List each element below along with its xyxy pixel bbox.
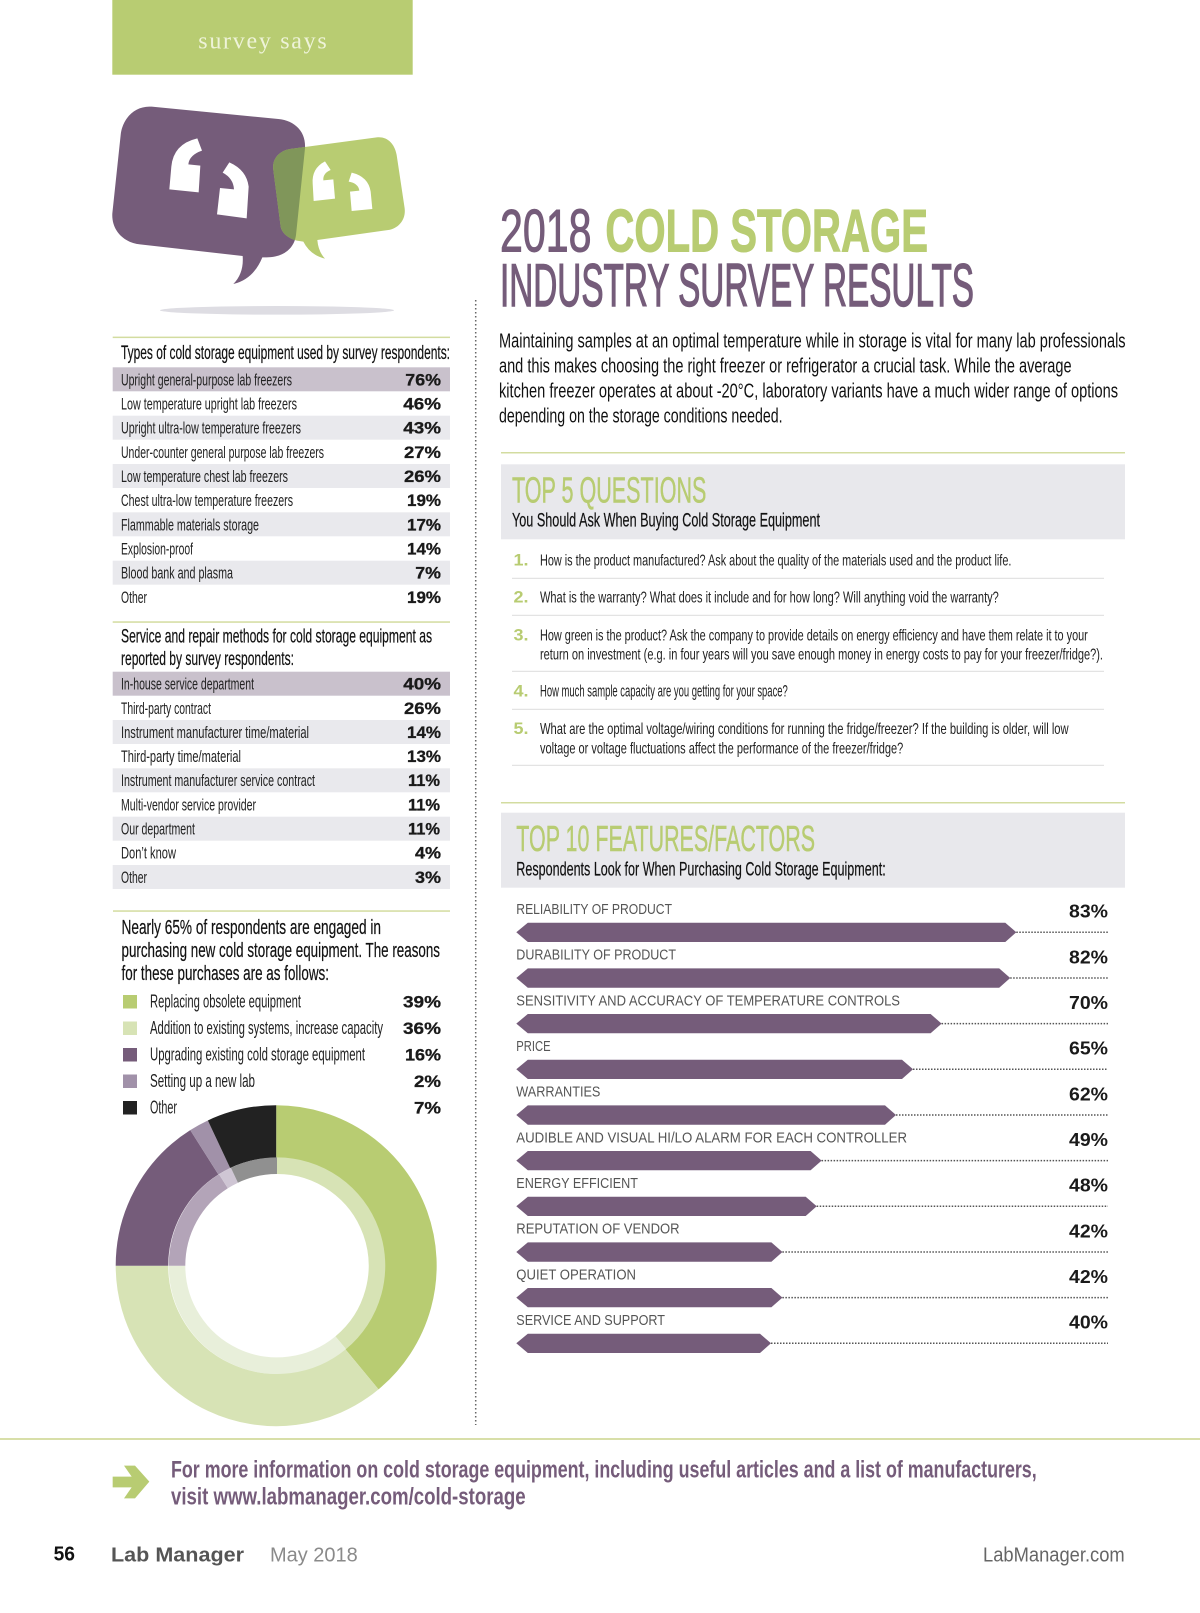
question 5 xyxy=(514,719,1069,757)
bar: warranties 62% xyxy=(516,1084,1108,1125)
panel: purchase reasons legend: 36% xyxy=(403,1020,441,1038)
question 5: voltage or voltage fluctuations affect the performance of the freezer/fridge? xyxy=(540,740,903,757)
panel: service and repair methods: Other xyxy=(121,868,147,887)
bar: price 65% xyxy=(516,1038,1108,1079)
panel: service and repair methods: 13% xyxy=(407,748,441,766)
panel: service and repair methods: Instrument manufacturer time/material xyxy=(121,723,309,742)
panel: service and repair methods: Our department xyxy=(121,820,195,839)
question 4: 4. xyxy=(514,682,528,701)
bar: price 65%: 65% xyxy=(1069,1039,1108,1059)
bar: reliability 83% xyxy=(516,901,1108,942)
callout: more information xyxy=(171,1457,1037,1511)
donut chart: purchase reasons xyxy=(142,1131,410,1400)
panel: service and repair methods: 11% xyxy=(408,796,440,814)
panel: purchase reasons legend: 39% xyxy=(403,993,441,1011)
panel: types of cold storage equipment: Explosion-proof xyxy=(121,540,193,559)
bar: alarm 49% xyxy=(516,1129,1108,1170)
panel: service and repair methods: Multi-vendor service provider xyxy=(121,795,256,814)
panel: top 10 features header: Respondents Look for When Purchasing Cold Storage Equipment: xyxy=(516,859,886,880)
title xyxy=(500,198,974,319)
question 4 xyxy=(514,682,788,701)
panel: service and repair methods: 4% xyxy=(415,845,441,863)
bar: service 40%: 40% xyxy=(1069,1313,1108,1333)
question 1: 1. xyxy=(514,550,528,569)
bar: quiet 42%: 42% xyxy=(1069,1267,1108,1287)
question 4: How much sample capacity are you getting for your space? xyxy=(540,682,788,701)
bar: alarm 49%: 49% xyxy=(1069,1130,1108,1150)
heading: equipment types: Types of cold storage equipment used by survey respondents: xyxy=(121,343,450,364)
panel: types of cold storage equipment: 76% xyxy=(405,371,441,389)
panel: types of cold storage equipment: Other xyxy=(121,588,147,607)
panel: service and repair methods: 11% xyxy=(408,772,440,790)
heading: purchase reasons xyxy=(122,916,440,985)
panel: types of cold storage equipment: 7% xyxy=(415,565,441,583)
icon: arrow xyxy=(113,1466,149,1498)
footer: 56 xyxy=(54,1544,75,1566)
panel: types of cold storage equipment xyxy=(113,337,450,607)
footer: LabManager.com xyxy=(983,1545,1125,1567)
footer: May 2018 xyxy=(270,1544,358,1566)
panel: service and repair methods: Don’t know xyxy=(121,844,176,863)
panel: purchase reasons legend: Setting up a new lab xyxy=(150,1071,255,1091)
intro paragraph xyxy=(499,330,1126,427)
question 2 xyxy=(514,588,999,607)
panel: purchase reasons legend xyxy=(113,910,450,1117)
panel: types of cold storage equipment: Low temperature chest lab freezers xyxy=(121,467,288,486)
panel: types of cold storage equipment: Upright ultra-low temperature freezers xyxy=(121,419,301,438)
callout: more information: visit www.labmanager.com/cold-storage xyxy=(171,1484,526,1511)
question 3 xyxy=(514,625,1103,663)
bar: service 40%: SERVICE AND SUPPORT xyxy=(516,1312,665,1329)
heading: service and repair xyxy=(121,627,432,670)
bar: durability 82% xyxy=(516,947,1108,988)
panel: types of cold storage equipment: 43% xyxy=(403,420,441,438)
panel: purchase reasons legend: Addition to existing systems, increase capacity xyxy=(150,1018,383,1038)
question 3: 3. xyxy=(514,625,528,644)
panel: service and repair methods: 26% xyxy=(404,700,441,718)
vertical dotted divider xyxy=(475,300,477,1425)
heading: purchase reasons: Nearly 65% of respondents are engaged in xyxy=(122,916,381,939)
panel: service and repair methods xyxy=(113,621,450,889)
panel: types of cold storage equipment: Blood bank and plasma xyxy=(121,564,233,583)
footer: Lab Manager xyxy=(111,1544,244,1566)
panel: top 10 features header: TOP 10 FEATURES/FACTORS xyxy=(516,818,815,859)
bar: alarm 49%: AUDIBLE AND VISUAL HI/LO ALARM FOR EACH CONTROLLER xyxy=(516,1129,907,1146)
bar: reliability 83%: 83% xyxy=(1069,902,1108,922)
panel: top 5 questions header xyxy=(501,464,1125,539)
panel: service and repair methods: 14% xyxy=(407,724,441,742)
footer xyxy=(54,1544,1125,1567)
question 2: 2. xyxy=(514,588,528,607)
bar: warranties 62%: WARRANTIES xyxy=(516,1084,600,1101)
bar: reputation 42%: REPUTATION OF VENDOR xyxy=(516,1221,680,1238)
panel: types of cold storage equipment: 17% xyxy=(407,516,441,534)
question 1 xyxy=(514,550,1011,569)
bar: service 40% xyxy=(516,1312,1108,1353)
bar: sensitivity 70%: 70% xyxy=(1069,993,1108,1013)
panel: purchase reasons legend: 2% xyxy=(414,1073,441,1091)
question 5: 5. xyxy=(514,719,528,738)
bar: warranties 62%: 62% xyxy=(1069,1084,1108,1104)
panel: service and repair methods: Instrument manufacturer service contract xyxy=(121,771,315,790)
question 2: What is the warranty? What does it include and for how long? Will anything void the warranty? xyxy=(540,590,999,607)
panel: purchase reasons legend: Other xyxy=(150,1097,177,1117)
panel: purchase reasons legend: Upgrading existing cold storage equipment xyxy=(150,1044,365,1064)
title: COLD STORAGE xyxy=(605,198,928,265)
panel: service and repair methods: Third-party contract xyxy=(121,699,211,718)
bar: sensitivity 70% xyxy=(516,992,1108,1033)
heading: purchase reasons: purchasing new cold storage equipment. The reasons xyxy=(122,939,440,962)
heading: service and repair: Service and repair methods for cold storage equipment as xyxy=(121,627,432,648)
panel: types of cold storage equipment: 26% xyxy=(404,468,441,486)
panel: service and repair methods: 11% xyxy=(408,821,440,839)
panel: types of cold storage equipment: Upright general-purpose lab freezers xyxy=(121,370,292,389)
panel: top 5 questions header: You Should Ask When Buying Cold Storage Equipment xyxy=(512,511,820,532)
title: 2018 xyxy=(500,198,592,265)
panel: top 10 features header xyxy=(501,813,1125,888)
section tab: survey says xyxy=(112,0,413,75)
panel: purchase reasons legend: Replacing obsolete equipment xyxy=(150,991,301,1011)
panel: types of cold storage equipment: 27% xyxy=(404,444,441,462)
bar: sensitivity 70%: SENSITIVITY AND ACCURACY OF TEMPERATURE CONTROLS xyxy=(516,992,900,1009)
panel: questions list xyxy=(512,550,1104,766)
panel: top 5 questions header: TOP 5 QUESTIONS xyxy=(512,470,706,511)
panel: service and repair methods: In-house service department xyxy=(121,675,254,694)
bar: reputation 42% xyxy=(516,1221,1108,1262)
section tab: survey says: survey says xyxy=(198,28,327,54)
bar: reputation 42%: 42% xyxy=(1069,1221,1108,1241)
panel: types of cold storage equipment: 14% xyxy=(407,541,441,559)
bar: durability 82%: DURABILITY OF PRODUCT xyxy=(516,947,676,964)
panel: types of cold storage equipment: Chest ultra-low temperature freezers xyxy=(121,491,293,510)
panel: service and repair methods: 40% xyxy=(403,676,441,694)
intro paragraph: depending on the storage conditions needed. xyxy=(499,405,783,427)
panel: types of cold storage equipment: 19% xyxy=(407,589,441,607)
panel: types of cold storage equipment: 46% xyxy=(403,396,441,414)
bar: quiet 42%: QUIET OPERATION xyxy=(516,1266,636,1283)
bar: energy 48%: 48% xyxy=(1069,1176,1108,1196)
bar: quiet 42% xyxy=(516,1266,1108,1307)
bar: durability 82%: 82% xyxy=(1069,947,1108,967)
panel: purchase reasons legend: 7% xyxy=(414,1099,441,1117)
panel: types of cold storage equipment: Under-counter general purpose lab freezers xyxy=(121,443,324,462)
bar chart: top 10 features xyxy=(516,901,1108,1353)
bar: reliability 83%: RELIABILITY OF PRODUCT xyxy=(516,901,672,918)
bar: energy 48% xyxy=(516,1175,1108,1216)
panel: types of cold storage equipment: 19% xyxy=(407,492,441,510)
heading: purchase reasons: for these purchases are as follows: xyxy=(122,962,329,985)
icon: speech bubbles with quotation marks xyxy=(112,107,405,315)
heading: service and repair: reported by survey respondents: xyxy=(121,649,294,670)
panel: types of cold storage equipment: Low temperature upright lab freezers xyxy=(121,395,297,414)
panel: types of cold storage equipment: Flammable materials storage xyxy=(121,515,259,534)
panel: purchase reasons legend: 16% xyxy=(405,1046,441,1064)
bar: price 65%: PRICE xyxy=(516,1038,551,1055)
panel: service and repair methods: 3% xyxy=(415,869,441,887)
panel: service and repair methods: Third-party time/material xyxy=(121,747,241,766)
bar: energy 48%: ENERGY EFFICIENT xyxy=(516,1175,638,1192)
